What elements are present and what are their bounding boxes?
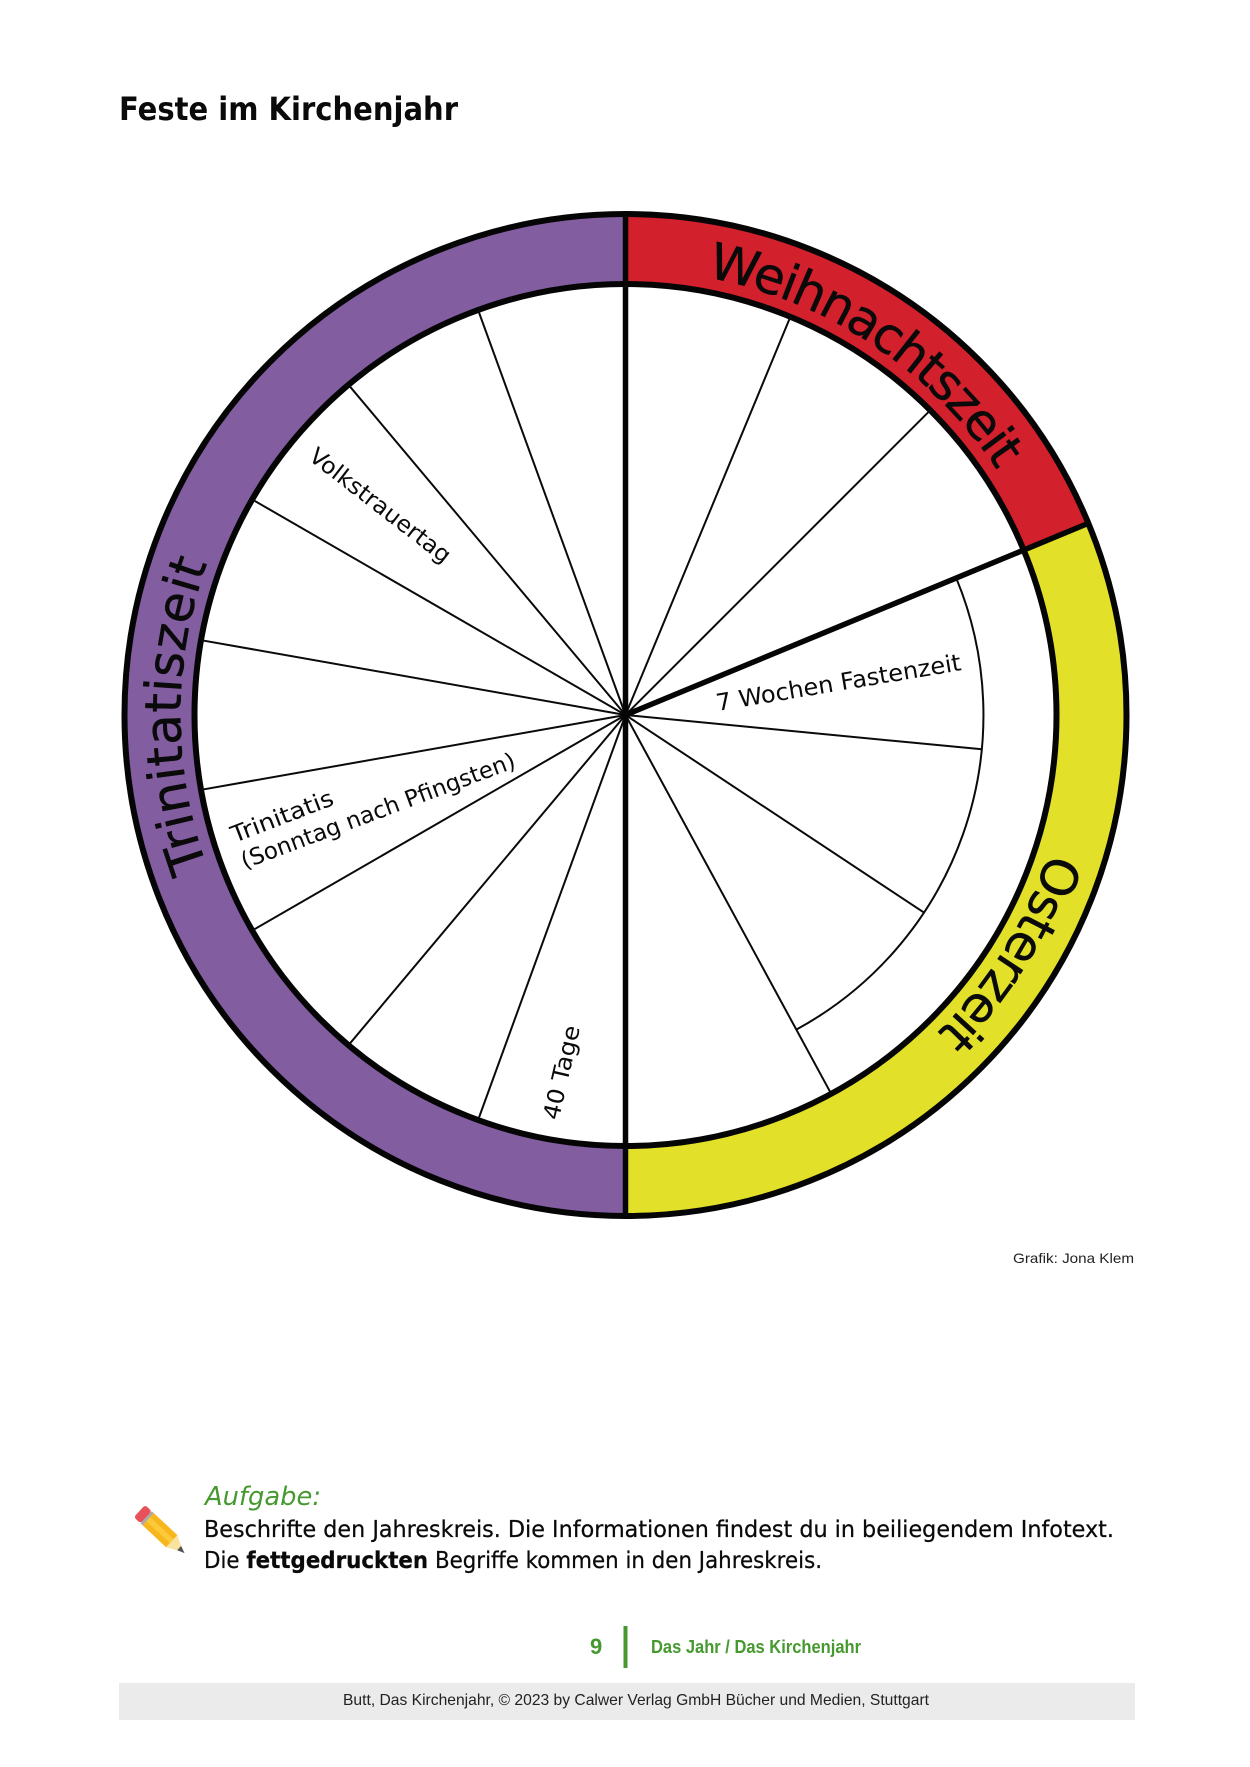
task text line 1: Beschrifte den Jahreskreis. Die Informationen findest du in beiliegendem Infotext. xyxy=(204,1517,1114,1543)
credit: Grafik: Jona Klem xyxy=(1013,1250,1134,1266)
ring segment: Weihnachtszeit xyxy=(626,249,1056,537)
label: Weihnachtszeit: Weihnachtszeit xyxy=(716,241,1020,470)
ring outlines xyxy=(124,214,1126,1216)
label: Osterzeit: Osterzeit xyxy=(938,860,1078,1052)
label: 40 Tage: 40 Tage xyxy=(539,1023,586,1122)
title: Feste im Kirchenjahr xyxy=(119,90,458,128)
icon: pencil xyxy=(134,1505,190,1559)
copyright bar xyxy=(119,1683,1135,1720)
page number: 9 xyxy=(590,1634,602,1659)
thin sector lines xyxy=(201,310,982,1120)
label: Trinitatiszeit: Trinitatiszeit xyxy=(143,555,207,880)
label: Volkstrauertag: Volkstrauertag xyxy=(304,443,456,569)
label: Trinitatis: Trinitatis xyxy=(226,786,337,849)
copyright text: Butt, Das Kirchenjahr, © 2023 by Calwer Verlag GmbH Bücher und Medien, Stuttgart xyxy=(343,1692,930,1709)
label: 7 Wochen Fastenzeit: 7 Wochen Fastenzeit xyxy=(714,648,963,717)
inner arc: Fastenzeit xyxy=(796,578,983,1030)
task heading: Aufgabe: xyxy=(203,1482,321,1512)
thick dividers xyxy=(626,211,1090,1219)
footer divider xyxy=(624,1626,628,1668)
label: Sonntag nach Pfingsten: (Sonntag nach Pfingsten) xyxy=(237,748,519,875)
task text line 2: Die fettgedruckten Begriffe kommen in den Jahreskreis. xyxy=(204,1548,822,1574)
ring segment: Osterzeit xyxy=(626,537,1091,1181)
ring segment: Trinitatiszeit xyxy=(160,249,626,1181)
task block xyxy=(203,1482,1114,1574)
footer chapter title: Das Jahr / Das Kirchenjahr xyxy=(651,1637,861,1657)
chart: church year wheel xyxy=(122,211,1130,1219)
